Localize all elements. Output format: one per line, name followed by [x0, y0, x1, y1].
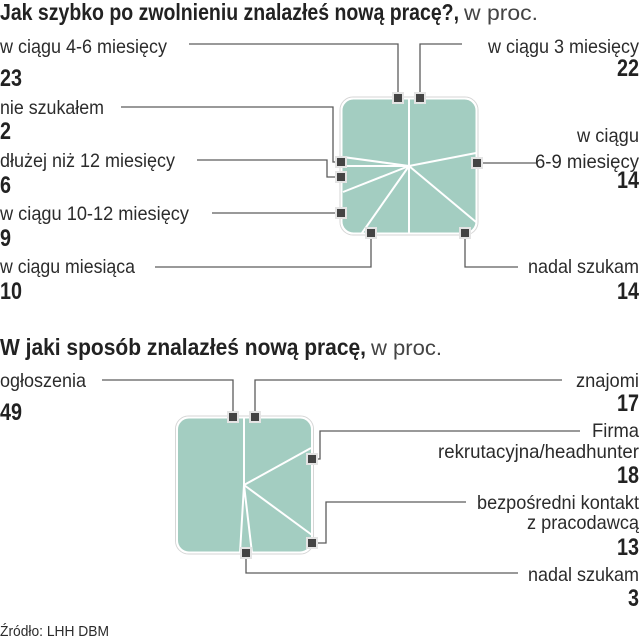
label: ogłoszenia 49	[0, 370, 86, 426]
chart: how the job was found	[102, 380, 580, 573]
source: Źródło: LHH DBM	[0, 623, 109, 640]
label: w ciągu 4-6 miesięcy 23	[0, 36, 167, 92]
label: nie szukałem 2	[0, 97, 104, 145]
label: Firma rekrutacyjna/headhunter 18	[438, 420, 639, 489]
markers 1	[336, 93, 482, 238]
label: znajomi 17	[576, 370, 639, 417]
label: w ciągu 4-6 miesięcy 23: w ciągu 4-6 miesięcy	[0, 36, 167, 58]
label: w ciągu 6-9 miesięcy 14	[535, 125, 640, 194]
label: nadal szukam 14	[528, 256, 640, 305]
label: ogłoszenia 49: 49	[0, 399, 22, 426]
label: dłużej niż 12 miesięcy 6	[0, 150, 175, 199]
square treemap 2	[176, 416, 314, 554]
label: dłużej niż 12 miesięcy 6: dłużej niż 12 miesięcy	[0, 150, 175, 172]
label: w ciągu 10-12 miesięcy 9: 9	[0, 225, 11, 252]
label: w ciągu miesiąca 10: w ciągu miesiąca	[0, 256, 135, 278]
label: w ciągu miesiąca 10	[0, 256, 135, 305]
label: ogłoszenia 49: ogłoszenia	[0, 370, 86, 392]
label: w ciągu 3 miesięcy 22	[487, 36, 639, 82]
markers 2	[228, 412, 317, 558]
label: w ciągu 4-6 miesięcy 23: 23	[0, 65, 22, 92]
label: nie szukałem 2: 2	[0, 118, 11, 145]
leader lines 2	[102, 380, 580, 573]
leader lines 1	[121, 44, 537, 267]
label: nie szukałem 2: nie szukałem	[0, 97, 104, 119]
chart: job search duration	[121, 44, 537, 267]
label: w ciągu 10-12 miesięcy 9	[0, 203, 189, 252]
title: second question: W jaki sposób znalazłeś nową pracę,	[0, 334, 366, 360]
title: first question: w proc.	[463, 2, 538, 25]
label: nadal szukam 3	[528, 564, 639, 612]
label: bezpośredni kontakt z pracodawcą 13	[477, 492, 640, 561]
label: w ciągu miesiąca 10: 10	[0, 278, 22, 305]
square treemap 1	[340, 97, 478, 235]
title: second question: w proc.	[370, 337, 442, 360]
label: dłużej niż 12 miesięcy 6: 6	[0, 172, 11, 199]
label: w ciągu 10-12 miesięcy 9: w ciągu 10-12 miesięcy	[0, 203, 189, 225]
